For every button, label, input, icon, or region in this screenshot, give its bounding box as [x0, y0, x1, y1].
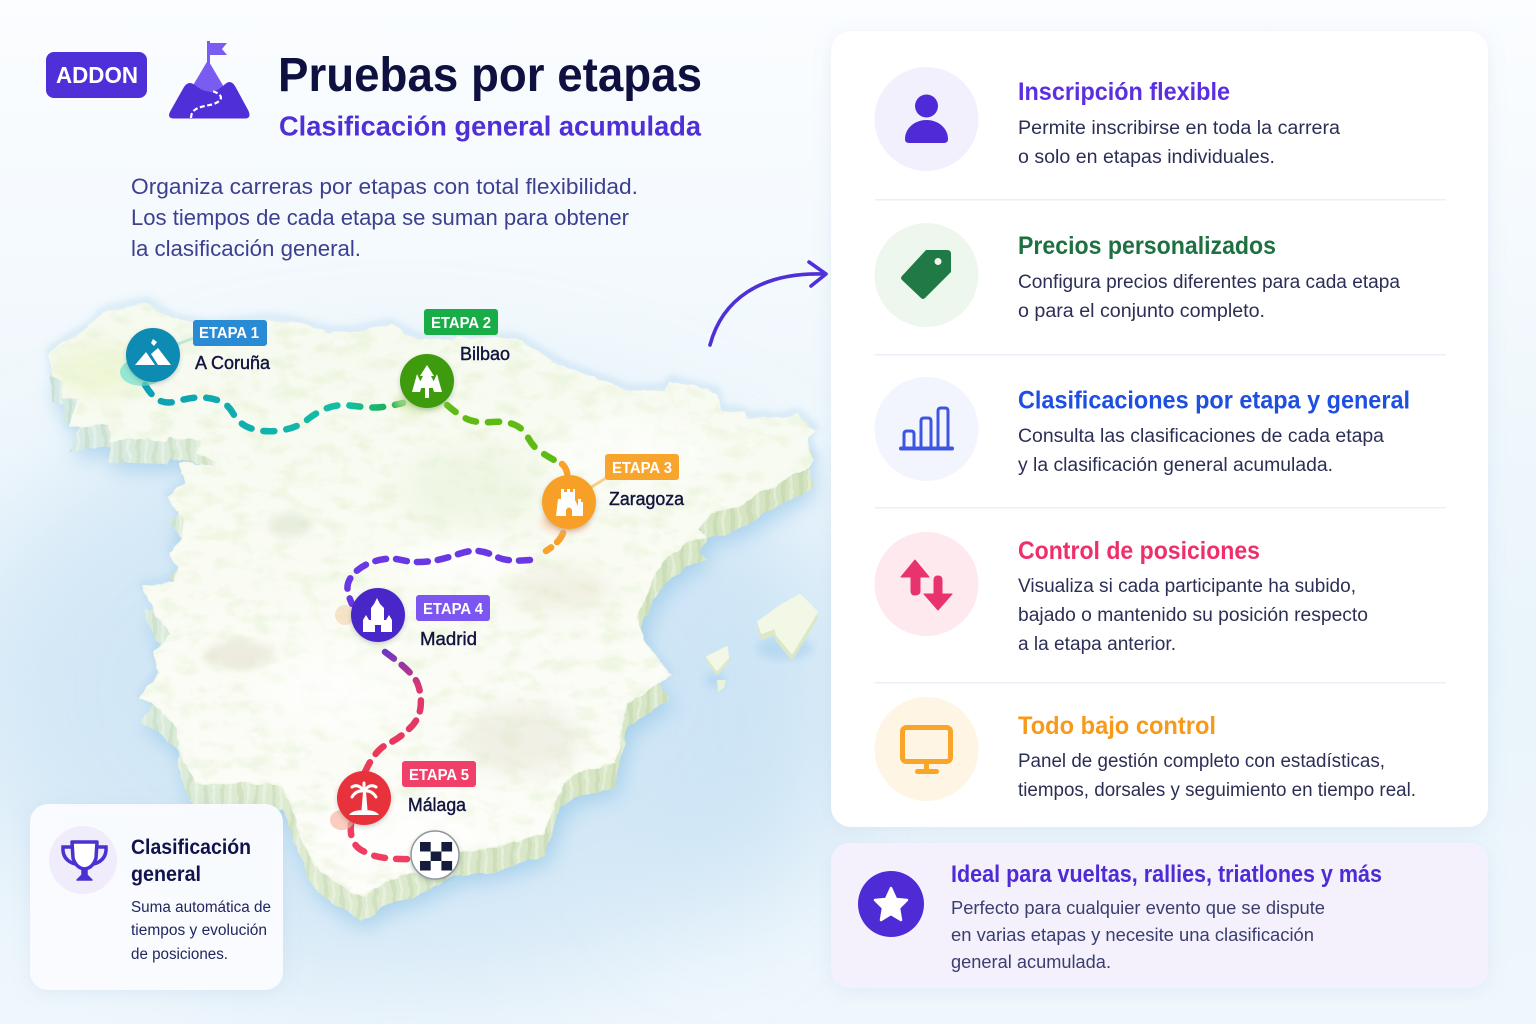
feature: position tracking: [874, 532, 1368, 655]
route: Zaragoza to Madrid: [347, 551, 530, 604]
finish flag marker: [411, 831, 459, 879]
panel: ideal for: Perfecto para cualquier evento que se dispute: [951, 897, 1325, 918]
feature: flexible registration: o solo en etapas individuales.: [1018, 147, 1275, 168]
feature: full control: Todo bajo control: [1018, 712, 1216, 740]
panel: general classification: [30, 804, 283, 990]
title: Pruebas por etapas: [278, 49, 702, 102]
feature: position tracking: bajado o mantenido su posición respecto: [1018, 605, 1368, 626]
stage 2: Bilbao: [394, 309, 510, 412]
feature: stage and overall rankings: Clasificaciones por etapa y general: [1018, 386, 1410, 414]
panel: general classification: Clasificación: [131, 836, 251, 859]
icon: mountain with flag: [170, 41, 249, 118]
panel: ideal for: en varias etapas y necesite una clasificación: [951, 924, 1314, 945]
intro text: Organiza carreras por etapas con total flexibilidad.: [131, 174, 638, 199]
intro text: la clasificación general.: [131, 236, 361, 261]
route: A Coruña to Bilbao: [145, 385, 403, 431]
panel: ideal for: [831, 843, 1488, 988]
route: Zaragoza connectors: [546, 464, 568, 551]
panel: general classification: de posiciones.: [131, 946, 228, 963]
route: Málaga to finish: [351, 824, 412, 859]
stage 5: Málaga: ETAPA 5: [409, 767, 469, 784]
panel: features: [831, 31, 1488, 827]
intro text: [131, 174, 638, 261]
stage 2: Bilbao: ETAPA 2: [431, 315, 491, 332]
panel: ideal for: Ideal para vueltas, rallies, triatlones y más: [951, 861, 1382, 888]
stage 1: A Coruña: A Coruña: [195, 353, 271, 373]
stage 2: Bilbao: Bilbao: [460, 344, 510, 364]
marker 3 with castle icon: [542, 475, 596, 529]
subtitle: Clasificación general acumulada: [279, 110, 701, 142]
icon: trophy: [49, 826, 117, 894]
badge: ADDON: [46, 52, 147, 98]
feature: stage and overall rankings: Consulta las clasificaciones de cada etapa: [1018, 426, 1384, 447]
stage 1: A Coruña: [120, 320, 271, 386]
stage 4: Madrid: [335, 588, 490, 649]
feature: flexible registration: Permite inscribirse en toda la carrera: [1018, 118, 1340, 139]
balearic islands: [705, 595, 817, 692]
panel: general classification: tiempos y evolución: [131, 922, 267, 939]
stage 5: Málaga: [330, 761, 476, 830]
stage 3: Zaragoza: ETAPA 3: [612, 460, 672, 477]
feature: flexible registration: [874, 67, 1340, 171]
marker 2 with tree icon: [400, 354, 454, 408]
feature: stage and overall rankings: [874, 377, 1410, 481]
feature: position tracking: Visualiza si cada participante ha subido,: [1018, 576, 1356, 597]
route: Bilbao to Zaragoza: [447, 405, 556, 461]
feature: full control: tiempos, dorsales y seguimiento en tiempo real.: [1018, 780, 1416, 801]
stage 4: Madrid: ETAPA 4: [423, 601, 483, 618]
route: Madrid to Málaga: [365, 652, 421, 772]
intro text: Los tiempos de cada etapa se suman para obtener: [131, 205, 629, 230]
feature: position tracking: a la etapa anterior.: [1018, 634, 1176, 655]
marker 5 with palm icon: [337, 771, 391, 825]
stage 3: Zaragoza: Zaragoza: [609, 489, 685, 509]
marker 4 with palace icon: [351, 588, 405, 642]
panel: general classification: Suma automática de: [131, 899, 271, 916]
stage 4: Madrid: Madrid: [420, 629, 477, 649]
feature: stage and overall rankings: y la clasificación general acumulada.: [1018, 455, 1333, 476]
feature: position tracking: Control de posiciones: [1018, 537, 1260, 565]
feature: custom pricing: [874, 223, 1400, 327]
icon: star: [858, 871, 924, 937]
marker 1 with mountain icon: [126, 328, 180, 382]
feature: custom pricing: Configura precios diferentes para cada etapa: [1018, 272, 1400, 293]
arrow to feature panel: [710, 262, 826, 345]
feature: custom pricing: Precios personalizados: [1018, 232, 1276, 260]
feature: full control: Panel de gestión completo con estadísticas,: [1018, 751, 1385, 772]
stage 3: Zaragoza: [541, 454, 685, 532]
stage 5: Málaga: Málaga: [408, 795, 467, 815]
feature: full control: [874, 697, 1416, 801]
feature: flexible registration: Inscripción flexible: [1018, 78, 1230, 106]
badge: ADDON: ADDON: [56, 62, 138, 88]
panel: ideal for: general acumulada.: [951, 951, 1111, 972]
feature: custom pricing: o para el conjunto completo.: [1018, 301, 1265, 322]
map of Spain: [40, 300, 830, 929]
stage 1: A Coruña: ETAPA 1: [199, 325, 259, 342]
panel: general classification: general: [131, 863, 201, 886]
